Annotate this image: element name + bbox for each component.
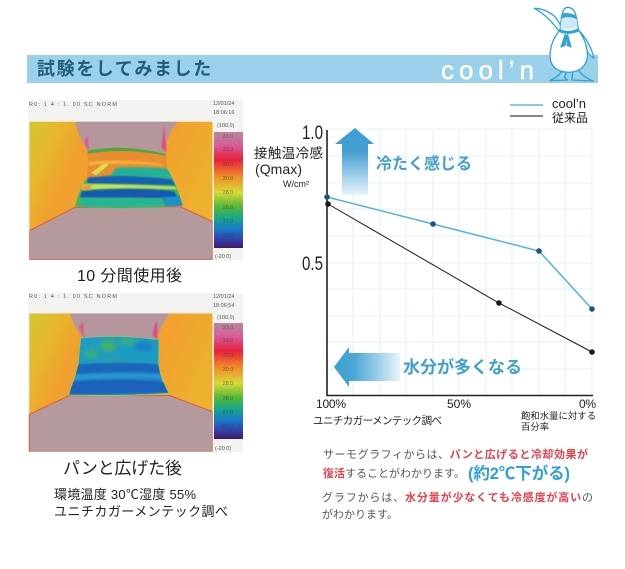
x axis labels [313, 397, 596, 432]
camera readout text: (-20.0) [215, 446, 231, 452]
finding: thermography continued: 復活することがわかります。 [323, 466, 465, 480]
temperature colour scale: 27.0 [223, 410, 233, 416]
heading: test title: 試験をしてみました [37, 59, 213, 79]
y axis labels: 1.0 [302, 123, 323, 144]
temperature colour scale: 25.0 [223, 434, 233, 440]
arrow label: feels cooler: 冷たく感じる [376, 154, 472, 173]
test conditions note [54, 487, 228, 519]
thermogram [29, 122, 213, 260]
caption: after snapping open: パンと広げた後 [63, 459, 182, 478]
brand wordmark: cool’n [441, 55, 539, 85]
camera readout text: 12/01/24 [213, 294, 234, 300]
text block: findings [322, 447, 593, 521]
temperature colour scale: 28.0 [223, 205, 233, 211]
test conditions note: ユニチカガーメンテック調べ [54, 504, 228, 519]
panel: thermal image after 10 minutes [28, 100, 243, 260]
callout: about 2 degrees lower: (約2℃下がる) [468, 463, 570, 483]
x axis labels: 100% [316, 397, 346, 411]
camera readout text: (100.0) [217, 315, 235, 321]
temperature colour scale: 33.0 [223, 338, 233, 344]
icon: penguin mascot [534, 7, 594, 81]
header band [27, 55, 598, 85]
camera readout text [29, 101, 235, 260]
temperature colour scale [214, 132, 243, 249]
finding: graph: グラフからは、水分量が少なくても冷感度が高いの [322, 490, 593, 504]
x axis labels: 0% [579, 397, 596, 411]
temperature colour scale: 33.0 [223, 147, 233, 153]
arrow label: more moisture: 水分が多くなる [403, 357, 522, 377]
temperature colour scale [214, 323, 243, 440]
camera readout text: R0: 1 4 : 1. 00 SC NORM [29, 294, 117, 300]
line chart: contact cool feeling vs moisture [254, 123, 596, 432]
camera readout text: 18:06:54 [213, 303, 234, 309]
y axis labels: 接触温冷感 [254, 145, 324, 161]
camera readout text: 12/01/24 [213, 101, 234, 107]
arrow: up, feels cooler [335, 128, 374, 195]
legend [510, 96, 588, 125]
x axis labels: ユニチカガーメンテック調べ [313, 415, 442, 427]
arrow: left, more moisture [334, 347, 400, 387]
temperature colour scale: 27.0 [223, 219, 233, 225]
temperature colour scale: 28.0 [223, 396, 233, 402]
finding: thermography: サーモグラフィからは、パンと広げると冷却効果が [323, 447, 588, 461]
temperature colour scale: 26.0 [223, 233, 233, 239]
y axis labels: 0.5 [302, 254, 323, 275]
series: cool'n [324, 194, 595, 312]
camera readout text: R0: 1 4 : 1. 00 SC NORM [29, 102, 117, 108]
temperature colour scale: 26.0 [223, 424, 233, 430]
camera readout text: (100.0) [217, 123, 235, 129]
x axis labels: 飽和水量に対する [521, 410, 596, 421]
series: conventional product [325, 201, 595, 355]
test conditions note: 環境温度 30℃湿度 55% [54, 487, 196, 502]
temperature colour scale: 28.0 [223, 381, 233, 387]
temperature colour scale: 30.0 [223, 162, 233, 168]
x axis labels: 百分率 [521, 422, 549, 432]
y axis labels [254, 123, 324, 275]
legend: cool’n [552, 96, 586, 111]
temperature colour scale: 30.0 [223, 367, 233, 373]
temperature colour scale: 25.0 [223, 243, 233, 249]
temperature colour scale: 33.0 [223, 325, 233, 331]
temperature colour scale: 30.0 [223, 353, 233, 359]
panel: thermal image after snapping open [28, 293, 243, 452]
x axis labels: 50% [447, 397, 471, 411]
camera readout text: (-20.0) [215, 254, 231, 260]
temperature colour scale: 30.0 [223, 176, 233, 182]
y axis labels: (Qmax) [255, 161, 302, 177]
temperature colour scale: 28.0 [223, 190, 233, 196]
axes [327, 130, 593, 396]
temperature colour scale: 33.0 [223, 134, 233, 140]
finding: graph continued: がわかります。 [322, 507, 398, 521]
camera readout text: 18:06:16 [213, 110, 234, 116]
thermogram [29, 313, 213, 452]
y axis labels: W/cm² [283, 179, 309, 189]
legend: 従来品 [552, 111, 588, 125]
camera readout text [29, 294, 235, 452]
caption: after 10 minutes of use: 10 分間使用後 [77, 267, 182, 285]
